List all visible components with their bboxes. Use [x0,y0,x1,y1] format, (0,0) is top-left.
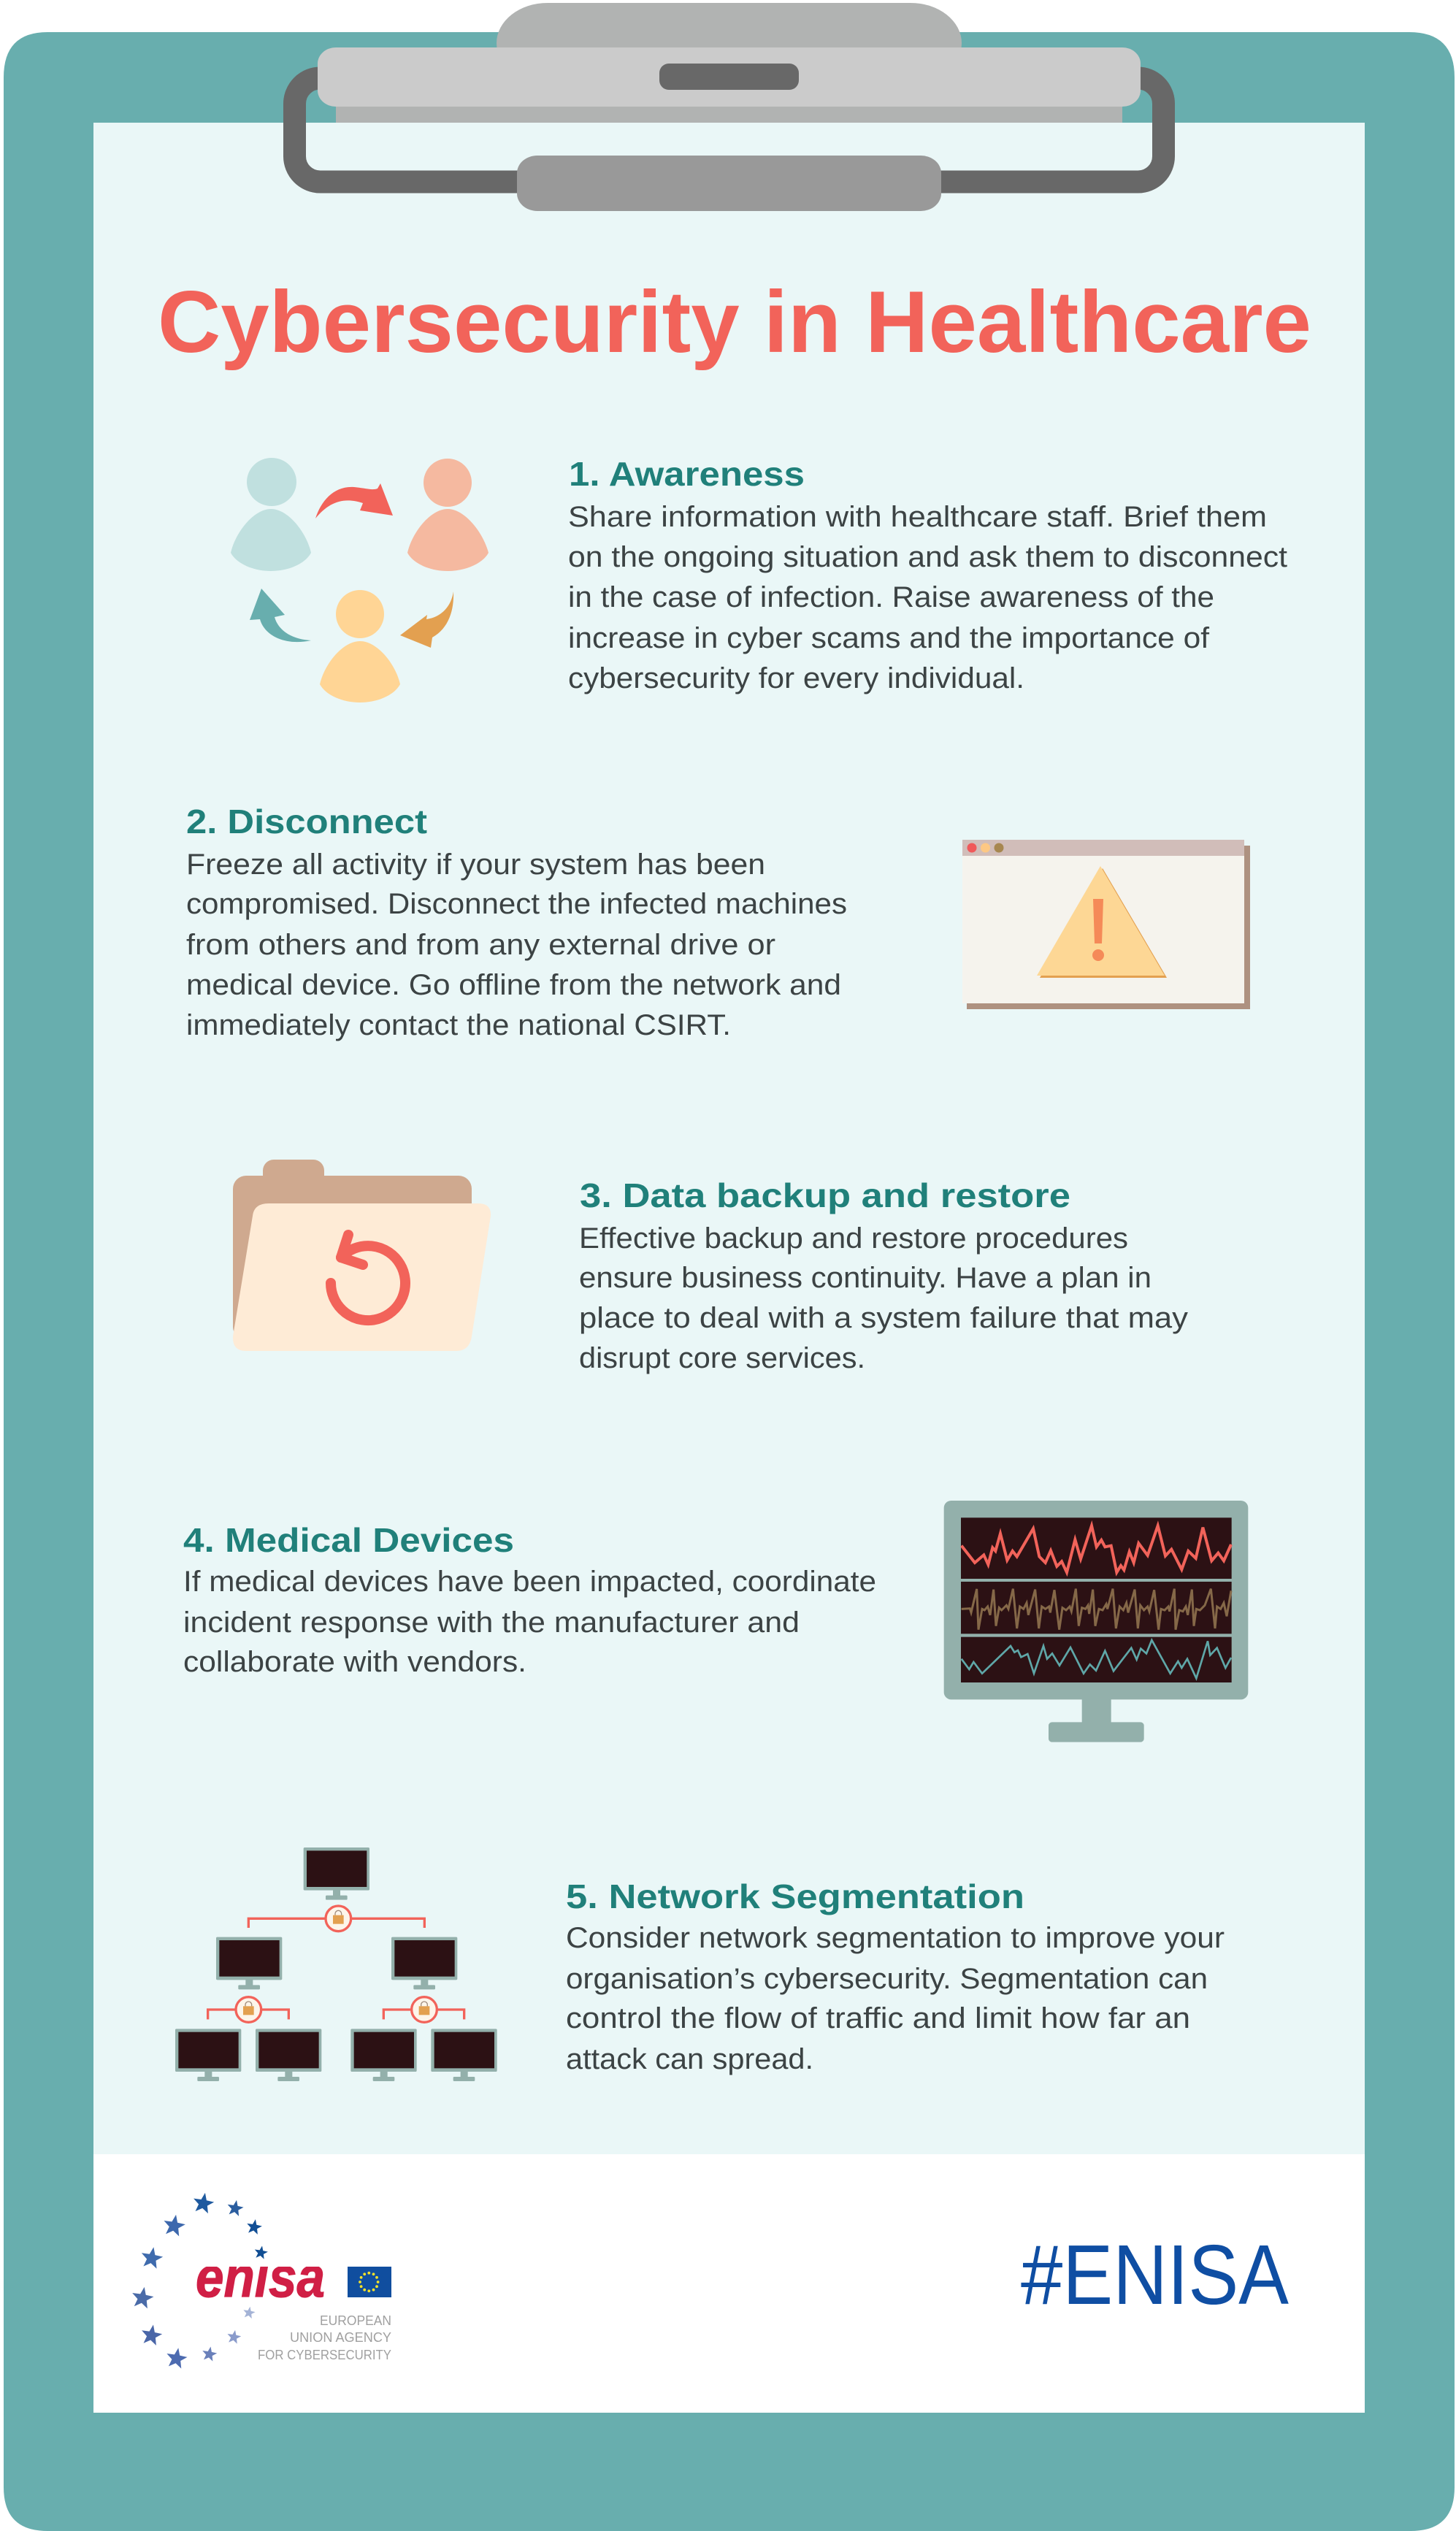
body text: place to deal with a system failure that may [579,1302,1188,1334]
body text [183,1566,876,1678]
lock: top [326,1906,351,1931]
body text [568,501,1287,694]
body text: medical device. Go offline from the network and [186,969,841,1001]
icon: segmented network tree [175,1847,497,2081]
body text: disrupt core services. [579,1342,865,1374]
body text: organisation’s cybersecurity. Segmentation can [566,1963,1208,1995]
logo: EU flag [348,2267,391,2297]
heading: 5. Network Segmentation [566,1877,1024,1915]
section 4 text [183,1521,876,1678]
logo: agency name: FOR CYBERSECURITY [258,2347,391,2362]
monitor: bottom 2 [256,2029,321,2081]
body text [579,1222,1188,1374]
icon: folder with restore arrow [233,1160,491,1351]
title: Cybersecurity in Healthcare [158,273,1311,371]
monitor: middle right [391,1937,457,1989]
body text: increase in cyber scams and the importance of [568,622,1210,654]
body text: ensure business continuity. Have a plan in [579,1262,1152,1294]
ENISA logo [130,2191,391,2369]
heading: 3. Data backup and restore [580,1176,1070,1214]
body text: Share information with healthcare staff. Brief them [568,501,1267,533]
body text: on the ongoing situation and ask them to disconnect [568,541,1287,573]
monitor: bottom 4 [431,2029,497,2081]
monitor: middle left [216,1937,282,1989]
body text: Consider network segmentation to improve your [566,1922,1225,1954]
logo: star ring [130,2191,269,2369]
body text: from others and from any external drive or [186,929,775,961]
body text: in the case of infection. Raise awareness of the [568,581,1214,613]
logo: wordmark: enisa [196,2245,325,2309]
icon: teal person [231,458,311,571]
arrow: red [315,483,393,518]
section 5 text [566,1877,1225,2075]
icon: three people sharing information [231,458,488,702]
body text: Freeze all activity if your system has been [186,849,765,881]
section 1 text [568,455,1287,694]
body text: compromised. Disconnect the infected machines [186,888,847,920]
white footer panel [93,2154,1365,2413]
icon: salmon person [407,459,488,571]
body text: Effective backup and restore procedures [579,1222,1128,1255]
section 2 text [186,803,847,1041]
network links [208,1918,464,2019]
body text: collaborate with vendors. [183,1646,526,1678]
monitor: bottom 3 [350,2029,417,2081]
body text: immediately contact the national CSIRT. [186,1009,731,1041]
heading: 4. Medical Devices [183,1521,514,1559]
hashtag: #ENISA [1021,2227,1290,2322]
monitor: root [304,1847,369,1900]
body text: If medical devices have been impacted, coordinate [183,1566,876,1598]
logo: agency name: EUROPEAN [320,2313,391,2328]
body text [186,849,847,1041]
heading: 2. Disconnect [186,803,427,841]
logo: agency name: UNION AGENCY [290,2329,391,2345]
lock: right [412,1997,437,2022]
paper sheet [93,123,1365,2160]
icon: medical monitor with waveforms [944,1501,1248,1742]
body text: attack can spread. [566,2043,813,2075]
clipboard clip [295,3,1164,211]
body text [566,1922,1225,2075]
monitor: bottom 1 [175,2029,241,2081]
icon: warning window [962,840,1250,1009]
body text: cybersecurity for every individual. [568,662,1024,694]
icon: yellow person [320,590,400,702]
logo: agency name [258,2313,391,2362]
body text: incident response with the manufacturer and [183,1607,800,1639]
lock: left [236,1997,261,2022]
arrow: orange [400,591,453,648]
body text: control the flow of traffic and limit how far an [566,2002,1190,2034]
section 3 text [579,1176,1188,1374]
heading: 1. Awareness [569,455,805,493]
arrow: teal [250,589,311,642]
